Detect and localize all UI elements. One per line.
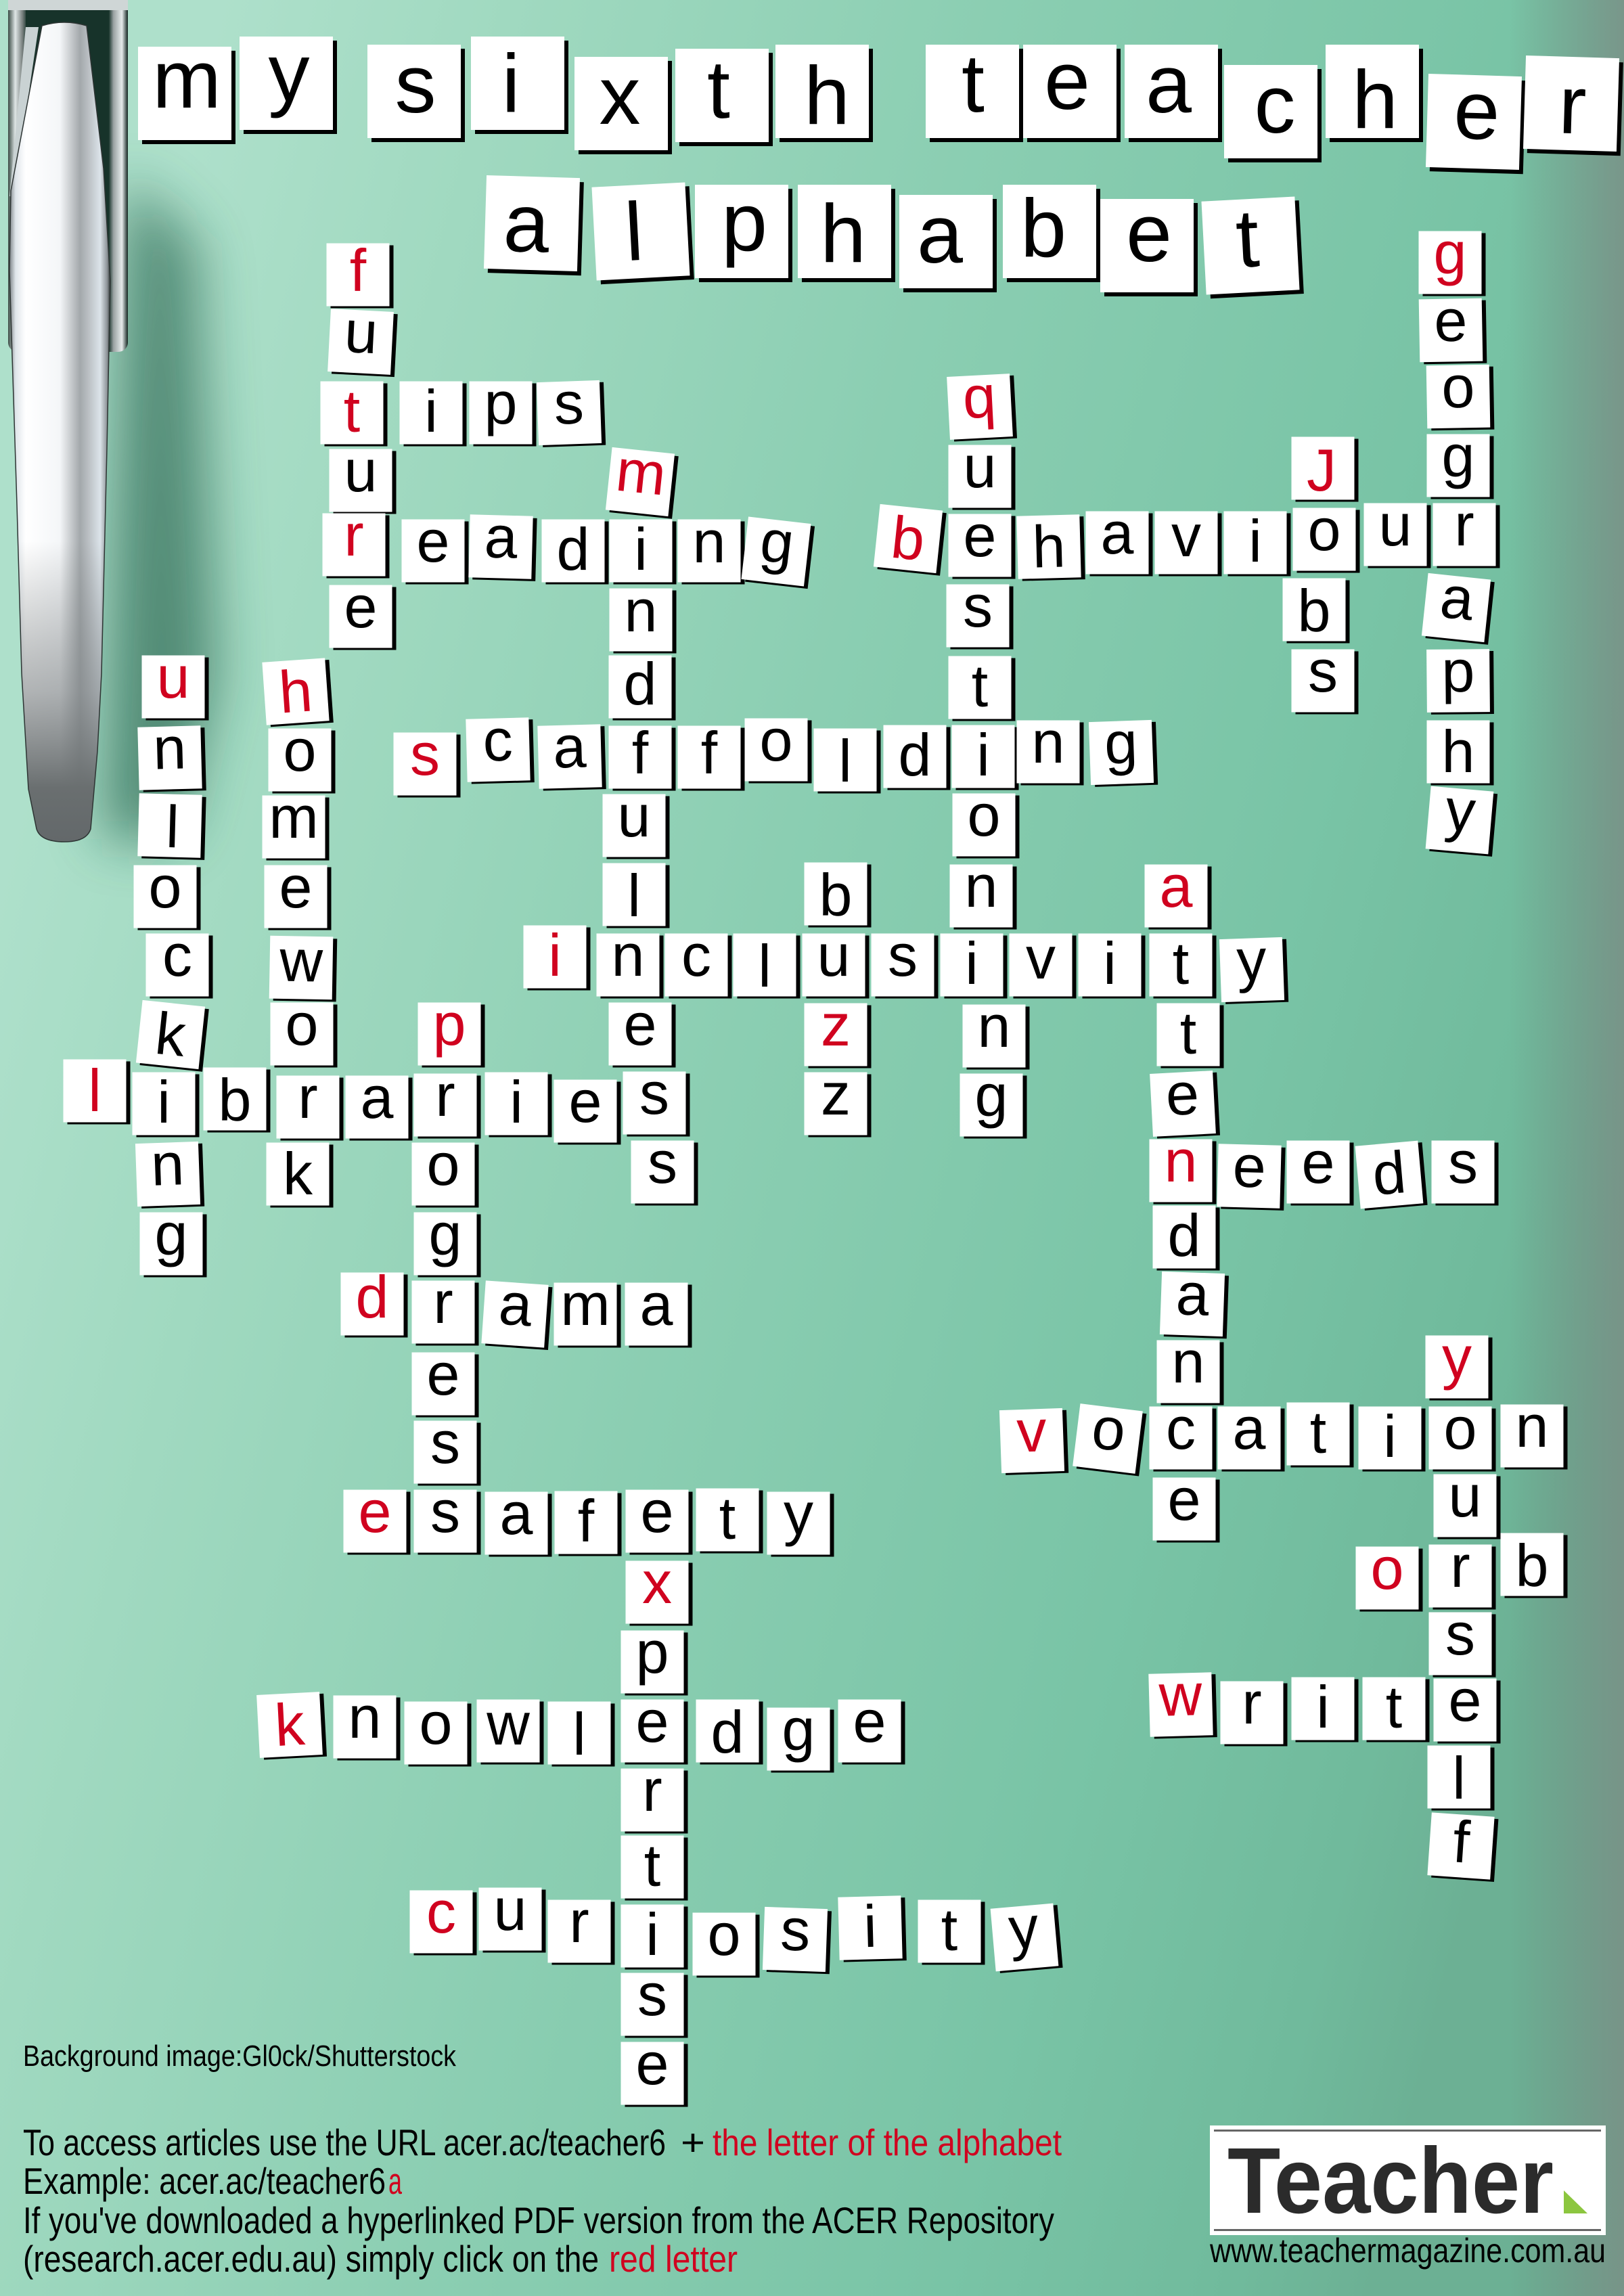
word: geography: o [1441,353,1475,420]
title: my sixth teacher: a [1146,38,1192,130]
word: behaviour: e [964,502,996,569]
word: progress [411,991,484,1486]
word: expertise: p [636,1619,669,1686]
instructions text: red letter [609,2238,738,2280]
word: libraries: i [510,1068,523,1135]
word: questioning: t [972,652,988,719]
word: write: t [1386,1673,1402,1740]
word: homework [262,655,338,1207]
title: alphabet: b [1020,182,1066,274]
word: drama: a [497,1269,535,1339]
instructions text: + [681,2121,705,2163]
word: unlocking: n [150,1130,185,1198]
word: unlocking: l [165,793,180,860]
word: tips: s [553,369,585,437]
word: questioning: g [975,1062,1008,1129]
word: questioning: n [978,993,1010,1060]
word: inclusivity: t [1173,930,1189,997]
title: my sixth teacher: e [1044,35,1090,127]
word: inclusivity: v [1026,924,1056,991]
word: homework: k [283,1140,313,1207]
word: needs: e [1232,1132,1267,1200]
word: esafety [344,1478,834,1556]
title: alphabet: a [502,177,551,270]
word: curiosity: o [708,1901,740,1968]
title: my sixth teacher: m [152,33,221,125]
word: vocation: c [1166,1395,1196,1462]
word: vocation: v [1016,1397,1047,1465]
word: knowledge: o [420,1690,452,1757]
word: expertise: e [636,2030,669,2097]
word: progress: s [430,1409,460,1476]
word: attendance: e [1168,1466,1200,1533]
word: questioning: s [963,572,993,639]
word: yourself: y [1442,1324,1472,1391]
word: geography: g [1434,219,1466,286]
word: unlocking: g [155,1200,187,1267]
word: libraries: r [298,1064,318,1131]
word: knowledge [256,1684,905,1773]
word: yourself: r [1450,1533,1470,1600]
word: attendance: t [1180,999,1196,1066]
word: geography: a [1437,563,1477,633]
word: attendance [1145,853,1230,1543]
instructions text: Example: acer.ac/teacher6 [23,2160,386,2202]
word: inclusivity: i [1103,930,1116,997]
word: yourself: f [1451,1807,1472,1876]
title: my sixth teacher: t [962,37,985,129]
word: reading: e [417,508,449,575]
word: homework: w [279,926,323,995]
title: my sixth teacher: h [804,49,850,141]
word: homework: e [279,853,312,920]
word: write [1148,1661,1429,1746]
word: unlocking [134,644,212,1278]
word: drama: a [640,1271,673,1338]
word: vocation: o [1088,1393,1129,1464]
word: scaffolding: s [410,721,440,788]
word: homework: h [277,656,315,726]
word: attendance: n [1172,1328,1204,1395]
word: jobs: s [1308,637,1338,704]
word: questioning: q [961,363,997,431]
word: mindfulness [602,435,698,1206]
word: inclusivity: y [1236,926,1267,994]
word: questioning: u [964,433,996,500]
word: mindfulness: m [613,436,669,508]
word: knowledge: w [486,1690,530,1757]
word: inclusivity: i [965,930,978,997]
word: buzz: z [821,991,851,1058]
word: orb [1356,1532,1567,1612]
word: jobs [1283,436,1359,715]
word: needs: s [1448,1129,1478,1196]
word: future: u [343,298,380,366]
word: expertise [621,1549,693,2107]
word: expertise: x [642,1549,672,1616]
word: scaffolding: f [701,719,718,786]
word: inclusivity: i [548,922,562,989]
word: geography: g [1442,422,1474,489]
word: behaviour: u [1379,491,1412,558]
word: mindfulness: l [627,862,641,929]
word: curiosity [410,1876,1063,1977]
word: write: w [1158,1661,1203,1729]
word: geography: y [1443,775,1478,845]
word: behaviour: v [1171,502,1201,569]
word: esafety: f [578,1487,595,1554]
word: vocation: n [1516,1393,1548,1460]
word: jobs: J [1307,436,1336,503]
word: yourself: u [1449,1462,1481,1529]
title: my sixth teacher: c [1255,58,1295,150]
word: geography: e [1433,287,1468,354]
word: future: e [344,573,377,640]
word: vocation: i [1383,1403,1397,1470]
word: reading: g [757,507,798,577]
word: esafety: e [359,1478,391,1545]
word: inclusivity: u [817,922,850,989]
word: reading: n [693,508,725,575]
word: expertise: r [642,1757,662,1824]
word: tips [399,368,606,447]
word: orb: o [1371,1535,1403,1602]
word: geography: h [1442,718,1474,785]
word: unlocking: c [162,922,192,989]
word: progress: r [433,1269,453,1336]
word: attendance: a [1175,1260,1211,1328]
word: esafety: s [430,1478,460,1545]
word: questioning: n [965,853,997,920]
word: scaffolding: f [632,719,649,786]
word: attendance: e [1164,1060,1200,1128]
word: libraries: s [639,1060,669,1127]
word: write: r [1242,1669,1262,1736]
instructions text: a [388,2160,402,2202]
word: future: r [344,501,364,568]
title: my sixth teacher: i [501,37,520,129]
title: my sixth teacher [138,26,1623,174]
word: reading: d [557,516,589,583]
instructions text: To access articles use the URL acer.ac/teacher6 [23,2121,666,2163]
word: knowledge: e [853,1688,886,1755]
word: scaffolding: i [976,721,990,788]
title: alphabet: l [623,185,646,278]
word: reading: i [634,516,648,583]
word: scaffolding [394,706,1158,797]
word: mindfulness: s [648,1129,677,1196]
word: behaviour: i [1248,508,1262,575]
word: libraries: l [88,1057,102,1124]
word: libraries [64,1057,690,1145]
title: my sixth teacher: y [268,26,310,118]
word: yourself: l [1452,1744,1466,1811]
word: tips: i [424,378,438,445]
word: future: f [350,237,367,304]
word: scaffolding: g [1103,708,1139,777]
word: questioning [946,361,1030,1138]
word: esafety: e [641,1478,673,1545]
word: scaffolding: c [482,706,514,774]
word: inclusivity: l [758,932,771,999]
word: mindfulness: n [625,577,657,644]
instructions text: (research.acer.edu.au) simply click on the [23,2238,599,2280]
word: esafety: a [500,1480,533,1547]
title: alphabet [484,175,1304,299]
Teacher logo: Teacher [1227,2129,1554,2233]
word: future [321,237,399,650]
word: jobs: b [1298,577,1330,644]
word: behaviour: a [1101,499,1134,566]
word: scaffolding: a [552,713,587,781]
word: libraries: b [219,1066,251,1133]
word: homework: o [286,991,318,1058]
word: knowledge: e [636,1688,669,1755]
word: future: u [344,437,377,504]
title: my sixth teacher: h [1352,53,1398,145]
word: behaviour: h [1031,512,1066,581]
word: vocation: o [1444,1395,1476,1462]
word: inclusivity: n [612,922,644,989]
word: knowledge: d [711,1698,744,1765]
word: knowledge: n [348,1684,381,1751]
word: progress: e [427,1341,459,1408]
image credit: Background image:Gl0ck/Shutterstock [23,2040,457,2073]
word: vocation: a [1233,1395,1266,1462]
word: progress: g [429,1200,461,1267]
word: scaffolding: d [899,721,931,788]
word: expertise: s [637,1961,667,2028]
word: orb: b [1516,1532,1548,1599]
word: knowledge: l [572,1701,586,1768]
word: yourself: e [1449,1667,1481,1734]
word: attendance: n [1165,1127,1197,1194]
word: libraries: e [569,1068,602,1135]
word: behaviour [874,491,1430,581]
title: my sixth teacher: e [1453,64,1501,157]
word: needs: d [1370,1138,1408,1208]
word: buzz [804,861,872,1137]
word: write: i [1316,1673,1330,1740]
word: inclusivity [524,922,1288,1004]
word: curiosity: c [426,1878,456,1945]
word: yourself [1425,1324,1501,1882]
instructions text: the letter of the alphabet [713,2121,1062,2163]
word: geography [1418,219,1499,857]
word: progress: p [433,991,466,1058]
word: mindfulness: d [624,650,656,717]
word: homework: m [269,784,319,851]
word: geography: p [1441,637,1475,704]
word: drama: d [356,1263,388,1330]
word: inclusivity: s [888,922,918,989]
word: scaffolding: l [838,727,852,794]
word: vocation [999,1392,1567,1477]
word: unlocking: k [152,999,189,1069]
title: alphabet: e [1126,187,1172,279]
word: scaffolding: n [1032,708,1064,775]
word: attendance: d [1168,1202,1200,1269]
word: libraries: r [435,1062,455,1129]
word: homework: o [284,717,316,784]
word: drama [341,1263,692,1350]
word: needs: e [1302,1129,1334,1196]
word: behaviour: o [1308,496,1340,563]
word: vocation: t [1310,1399,1326,1466]
word: libraries: a [361,1064,394,1131]
word: curiosity: u [494,1876,526,1943]
word: needs [1217,1129,1498,1211]
word: reading [402,503,816,589]
word: unlocking: n [152,714,187,782]
word: attendance: a [1160,853,1193,920]
word: curiosity: i [863,1893,878,1960]
word: mindfulness: e [624,991,656,1058]
title: alphabet: p [721,176,767,268]
title: my sixth teacher: x [600,49,640,141]
word: esafety: t [719,1485,736,1552]
word: mindfulness: u [618,782,650,849]
word: curiosity: s [780,1895,811,1964]
word: questioning: o [968,782,1000,849]
word: drama: m [560,1271,610,1338]
word: reading: a [484,503,518,571]
word: knowledge: k [273,1690,307,1759]
word: scaffolding: o [760,706,792,773]
word: behaviour: b [888,503,928,573]
word: curiosity: y [1006,1893,1041,1962]
word: unlocking: u [157,644,189,711]
title: alphabet: h [820,187,866,279]
word: libraries: i [157,1068,171,1135]
title: my sixth teacher: t [707,43,730,135]
title: alphabet: t [1234,192,1261,285]
title: my sixth teacher: r [1558,58,1587,152]
fridge handle [8,0,217,842]
word: tips: p [484,369,517,436]
word: expertise: i [646,1901,659,1968]
word: inclusivity: c [681,922,711,989]
word: buzz: b [819,861,852,928]
word: esafety: y [784,1480,813,1547]
word: future: t [344,378,360,445]
word: geography: r [1454,491,1474,558]
word: unlocking: o [149,853,181,920]
instructions text: If you've downloaded a hyperlinked PDF version from the ACER Repository [23,2199,1054,2241]
title: alphabet: a [917,188,963,280]
word: curiosity: r [569,1888,589,1955]
word: expertise: t [644,1832,660,1899]
word: yourself: s [1445,1600,1475,1667]
word: curiosity: t [941,1896,957,1963]
instructions text [23,2121,1062,2280]
word: progress: o [427,1131,459,1198]
title: my sixth teacher: s [395,38,436,130]
word: knowledge: g [782,1696,815,1763]
word: buzz: z [821,1060,851,1127]
